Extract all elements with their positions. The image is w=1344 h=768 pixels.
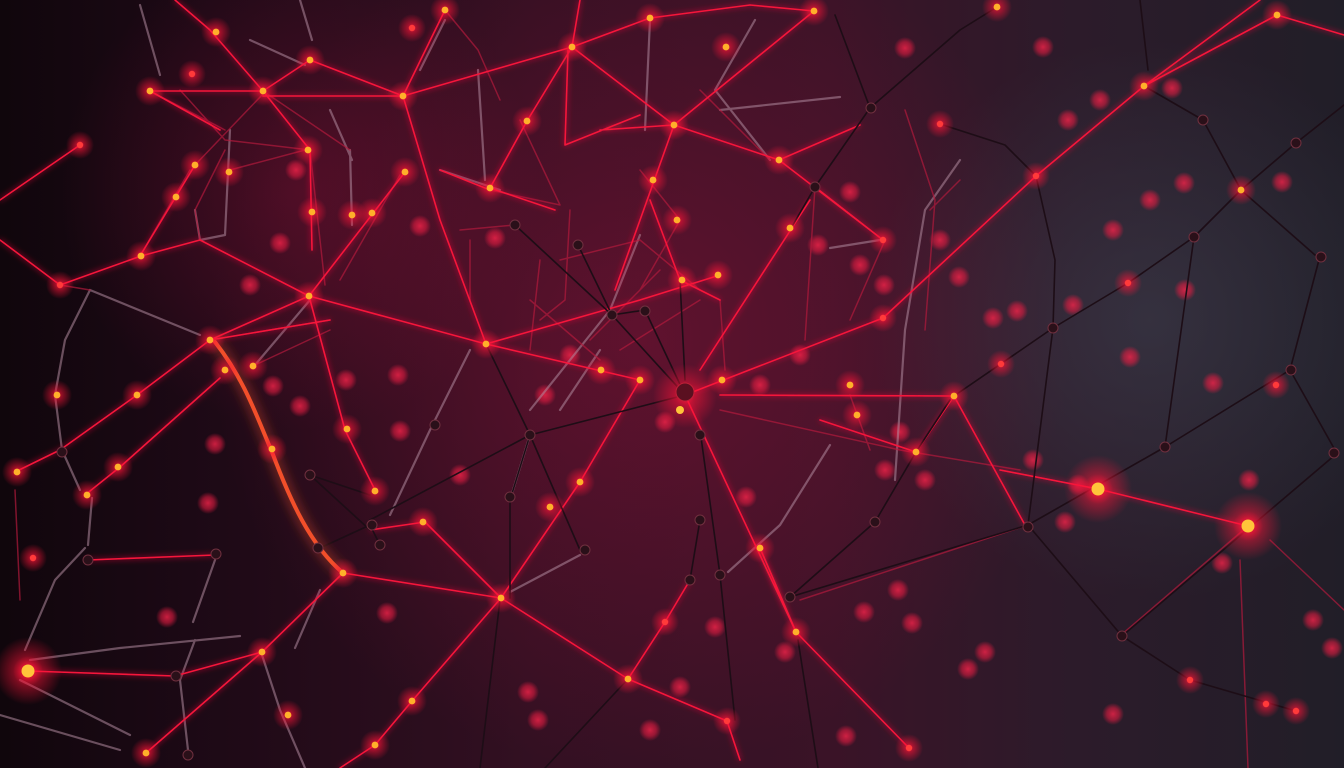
glowing orange trunk curve bbox=[215, 342, 343, 573]
central hub node bbox=[653, 364, 717, 428]
dark network lines bbox=[310, 0, 1344, 768]
grey background strands bbox=[0, 0, 960, 768]
large bright nodes bbox=[0, 455, 1282, 705]
